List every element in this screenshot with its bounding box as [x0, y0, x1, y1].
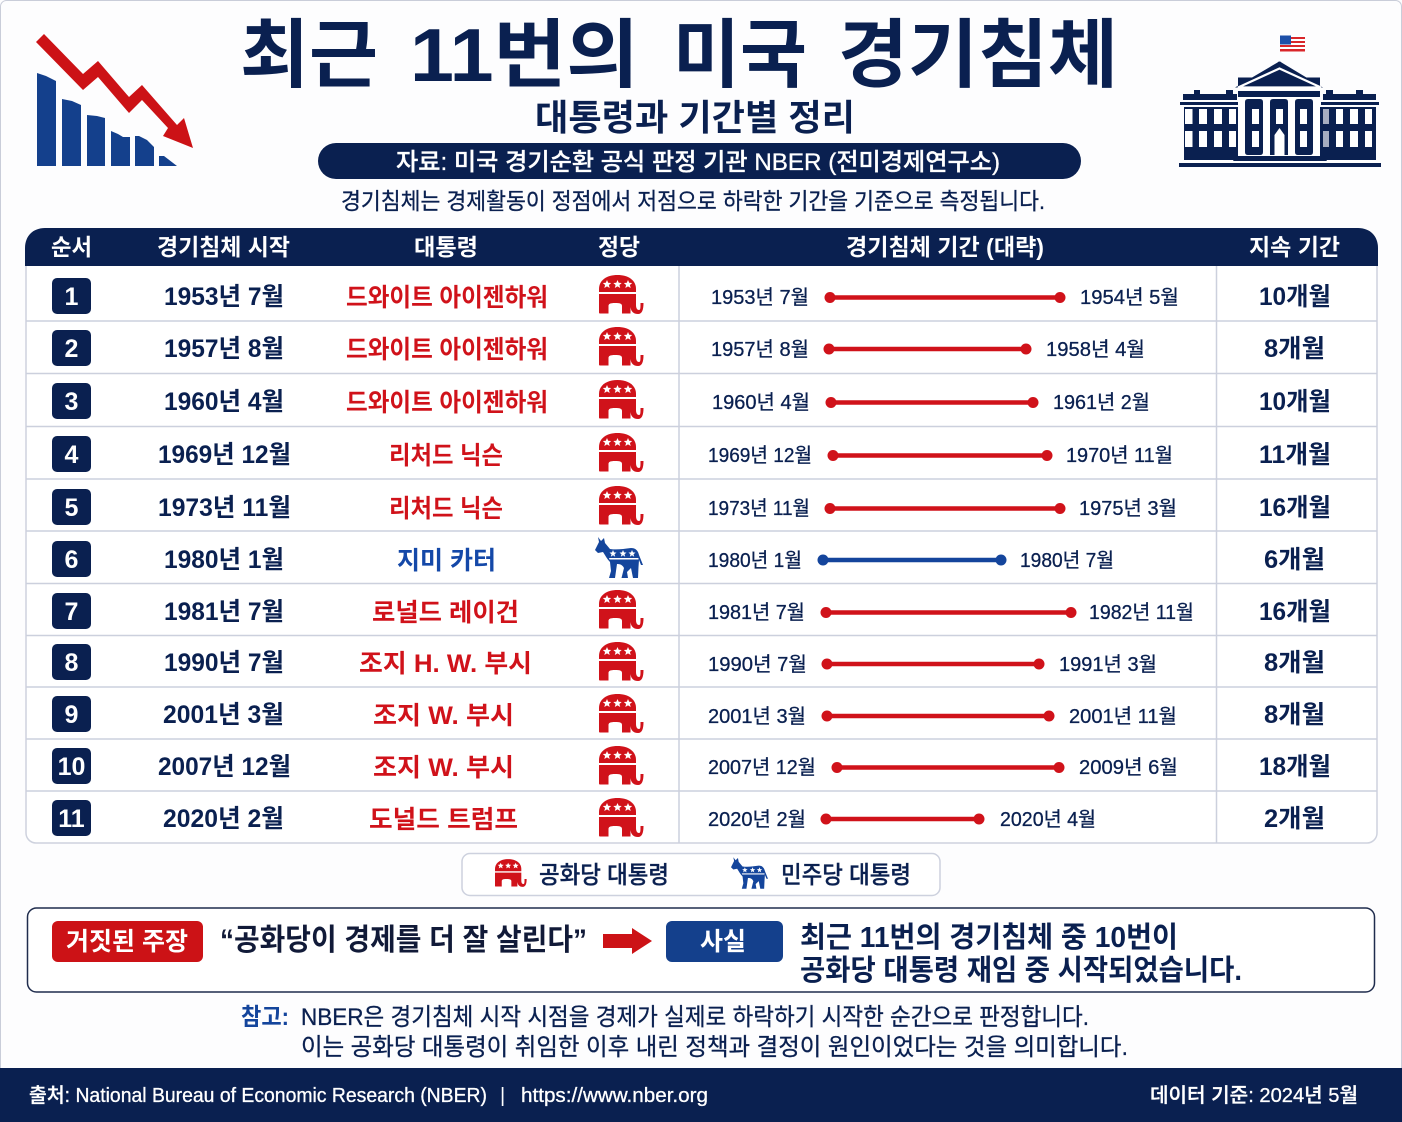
- label: false claim: 거짓된 주장: [66, 928, 188, 956]
- row 5: 1973년 11월: [708, 497, 810, 520]
- row 2: [52, 327, 1325, 366]
- title: 미국: [673, 13, 807, 97]
- row 7: 7: [65, 598, 78, 626]
- row 9: 2001년 3월: [708, 705, 806, 728]
- footer: 데이터 기준: 2024년 5월: [1150, 1084, 1358, 1107]
- row 8: 8: [65, 649, 79, 677]
- row 11: 11: [58, 805, 85, 833]
- footer: 출처: National Bureau of Economic Research (NBER): [29, 1084, 487, 1107]
- description text: 경기침체는 경제활동이 정점에서 저점으로 하락한 기간을 기준으로 측정됩니다.: [341, 188, 1045, 214]
- row 8: [52, 642, 1325, 681]
- footer: [0, 1068, 1402, 1122]
- row 4: 4: [65, 441, 79, 469]
- title: 경기침체: [838, 13, 1118, 97]
- row 1: 1953년 7월: [164, 283, 284, 311]
- row 9: 2001년 3월: [163, 701, 284, 729]
- row 4: 1970년 11월: [1066, 444, 1173, 467]
- row 11: [52, 798, 1325, 837]
- callout: [28, 908, 1374, 992]
- arrow: [603, 928, 652, 954]
- note: [241, 1004, 1128, 1061]
- fact text: 최근 11번의 경기침체 중 10번이: [800, 921, 1178, 954]
- row 4: 11개월: [1259, 441, 1331, 469]
- icon: White House with flag: [1179, 36, 1381, 167]
- row 2: 1958년 4월: [1046, 338, 1145, 361]
- row 7: 1981년 7월: [708, 601, 805, 624]
- source pill: [318, 143, 1081, 179]
- row 9: 8개월: [1264, 701, 1325, 729]
- row 3: 1960년 4월: [712, 391, 810, 414]
- legend: Democrat: 민주당 대통령: [781, 862, 911, 889]
- table header: 경기침체 시작: [157, 234, 290, 260]
- row 2: 1957년 8월: [164, 335, 284, 363]
- table header: 정당: [598, 234, 640, 260]
- row 11: 2020년 4월: [1000, 808, 1096, 831]
- table body frame: [26, 250, 1377, 843]
- row 10: 2007년 12월: [158, 753, 291, 781]
- row 7: 1981년 7월: [164, 598, 284, 626]
- fact text: [800, 921, 1242, 987]
- legend: Democrat: [731, 857, 911, 889]
- row 2: 1957년 8월: [711, 338, 809, 361]
- row 10: [52, 746, 1331, 785]
- row 5: [52, 486, 1331, 525]
- table header: 순서: [51, 234, 92, 260]
- table header: 대통령: [414, 234, 478, 260]
- row 10: 2009년 6월: [1079, 756, 1178, 779]
- row 3: 1961년 2월: [1053, 391, 1150, 414]
- row 4: 1969년 12월: [158, 441, 291, 469]
- row 1: [52, 275, 1331, 314]
- row 7: 1982년 11월: [1089, 601, 1194, 624]
- table header: 지속 기간: [1249, 234, 1340, 260]
- row 9: 2001년 11월: [1069, 705, 1177, 728]
- row 8: 1990년 7월: [708, 653, 807, 676]
- row 4: 리처드 닉슨: [389, 442, 503, 470]
- row 2: 드와이트 아이젠하워: [346, 336, 548, 364]
- icon: US flag: [1280, 36, 1305, 52]
- footer: |: [500, 1085, 505, 1107]
- row 3: 3: [65, 388, 78, 416]
- row 1: 10개월: [1259, 283, 1331, 311]
- row 6: 지미 카터: [397, 547, 496, 575]
- subtitle: 대통령과 기간별 정리: [535, 97, 855, 138]
- row 3: [52, 380, 1331, 419]
- note: 참고:: [241, 1004, 289, 1031]
- note: 이는 공화당 대통령이 취임한 이후 내린 정책과 결정이 원인이었다는 것을 의미합니다.: [301, 1034, 1128, 1061]
- row 5: 1973년 11월: [158, 494, 291, 522]
- row 3: 1960년 4월: [164, 388, 284, 416]
- row 6: 1980년 7월: [1020, 549, 1114, 572]
- row 10: 18개월: [1259, 753, 1331, 781]
- row 10: 10: [58, 753, 85, 781]
- quote: “공화당이 경제를 더 잘 살린다”: [220, 924, 587, 957]
- row 11: 도널드 트럼프: [369, 806, 518, 834]
- row 8: 8개월: [1264, 649, 1325, 677]
- label: fact: 사실: [700, 928, 746, 956]
- legend: [462, 854, 940, 896]
- row 11: 2개월: [1264, 805, 1325, 833]
- row 10: 2007년 12월: [708, 756, 816, 779]
- source pill: 자료: 미국 경기순환 공식 판정 기관 NBER (전미경제연구소): [396, 149, 1000, 176]
- row 6: [52, 537, 1325, 578]
- row 5: 5: [65, 494, 79, 522]
- title: [240, 13, 1118, 97]
- table header: 경기침체 기간 (대략): [846, 234, 1044, 260]
- row 1: 드와이트 아이젠하워: [346, 284, 548, 312]
- row 2: 8개월: [1264, 335, 1325, 363]
- row 11: 2020년 2월: [708, 808, 806, 831]
- row 8: 1990년 7월: [164, 649, 284, 677]
- row 2: 2: [65, 335, 78, 363]
- row 3: 드와이트 아이젠하워: [346, 389, 548, 417]
- row 1: 1953년 7월: [711, 286, 809, 309]
- row 8: 조지 H. W. 부시: [359, 650, 532, 678]
- fact text: 공화당 대통령 재임 중 시작되었습니다.: [800, 954, 1242, 987]
- row 6: 1980년 1월: [708, 549, 802, 572]
- row 7: [52, 590, 1331, 629]
- row 7: 16개월: [1259, 598, 1331, 626]
- icon: falling bar chart with red arrow: [36, 34, 193, 166]
- title: 최근: [240, 13, 378, 97]
- row 9: 9: [65, 701, 78, 729]
- row 6: 1980년 1월: [164, 546, 284, 574]
- row 1: 1: [65, 283, 79, 311]
- row 8: 1991년 3월: [1059, 653, 1157, 676]
- row 5: 리처드 닉슨: [389, 495, 503, 523]
- row 9: 조지 W. 부시: [373, 702, 514, 730]
- label: fact: [666, 921, 783, 962]
- row 3: 10개월: [1259, 388, 1331, 416]
- legend: Republican: [495, 859, 669, 889]
- row 11: 2020년 2월: [163, 805, 284, 833]
- row 9: [52, 694, 1325, 733]
- row 4: 1969년 12월: [708, 444, 812, 467]
- note: NBER은 경기침체 시작 시점을 경제가 실제로 하락하기 시작한 순간으로 판정합니다.: [301, 1004, 1089, 1031]
- row 4: [52, 433, 1331, 472]
- table header: [25, 228, 1378, 266]
- row 5: 1975년 3월: [1079, 497, 1177, 520]
- row 6: 6: [65, 546, 78, 574]
- row 6: 6개월: [1264, 546, 1325, 574]
- footer: https://www.nber.org: [521, 1085, 708, 1107]
- row 5: 16개월: [1259, 494, 1331, 522]
- title: 11번의: [410, 13, 639, 97]
- row 7: 로널드 레이건: [372, 599, 519, 627]
- table: [25, 228, 1378, 843]
- legend: Republican: 공화당 대통령: [539, 862, 669, 889]
- row 10: 조지 W. 부시: [373, 754, 514, 782]
- label: false claim: [52, 921, 203, 962]
- row 1: 1954년 5월: [1080, 286, 1179, 309]
